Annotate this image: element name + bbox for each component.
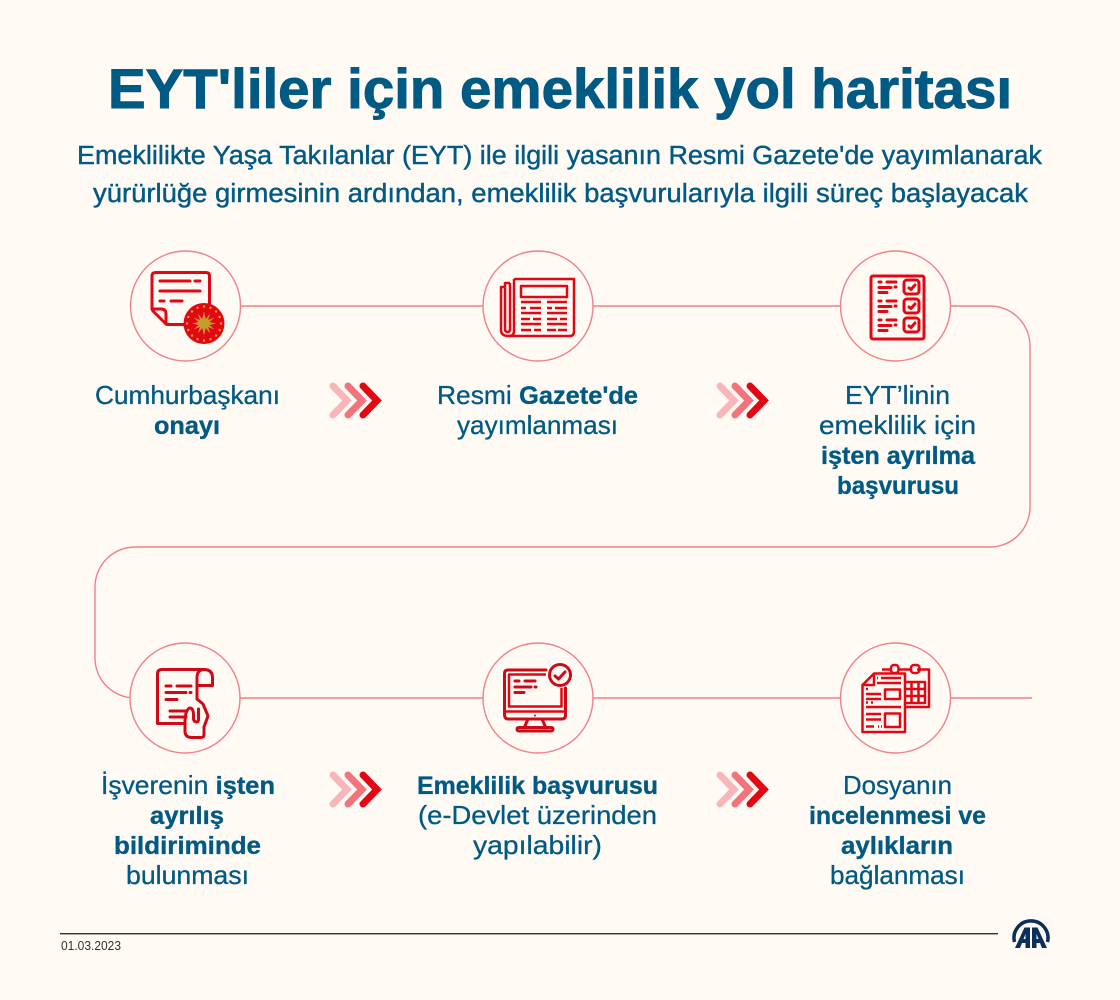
icon: hand holding scroll — [158, 670, 212, 738]
label: Dosyanın — [843, 770, 952, 800]
icon: documents and calendar — [862, 665, 929, 732]
step 6: Dosyanın incelenmesi ve aylıkların bağlanması: bağlanması — [830, 860, 965, 890]
step 5: Emeklilik başvurusu (e-Devlet): (e-Devlet üzerinden — [418, 800, 657, 830]
step 5: Emeklilik başvurusu (e-Devlet) — [417, 643, 658, 860]
step 2: Resmi Gazete'de yayımlanması — [437, 251, 638, 440]
step 3: EYT'linin emeklilik için işten ayrılma başvurusu: emeklilik için — [819, 410, 976, 440]
icon: newspaper — [501, 279, 574, 336]
footer rule — [60, 933, 998, 934]
subtitle: Emeklilikte Yaşa Takılanlar (EYT) ile ilgili yasanın Resmi Gazete'de yayımlanarak — [77, 142, 1042, 170]
step 4: İşverenin işten ayrılış bildiriminde bulunması — [101, 643, 275, 890]
step 4: İşverenin işten ayrılış bildiriminde bulunması: ayrılış — [150, 802, 224, 830]
arrow: chevrons 4 — [720, 775, 764, 804]
icon: AA logo — [1014, 921, 1048, 948]
label: Resmi Gazete'de — [437, 380, 638, 410]
step 5: Emeklilik başvurusu (e-Devlet): yapılabilir) — [473, 830, 602, 860]
icon: document with presidential seal — [152, 272, 224, 344]
step 6: Dosyanın incelenmesi ve aylıkların bağlanması: incelenmesi ve — [809, 802, 986, 830]
title: EYT'liler için emeklilik yol haritası — [108, 57, 1012, 120]
step 4: İşverenin işten ayrılış bildiriminde bulunması: bulunması — [126, 860, 249, 890]
subtitle — [77, 142, 1042, 208]
date: 01.03.2023 — [61, 939, 121, 953]
subtitle: yürürlüğe girmesinin ardından, emeklilik başvurularıyla ilgili süreç başlayacak — [93, 180, 1028, 208]
step 1: Cumhurbaşkanı onayı: onayı — [154, 412, 220, 440]
arrow: chevrons 1 — [333, 386, 377, 415]
connector path — [95, 306, 1032, 698]
arrow: chevrons 2 — [720, 386, 764, 415]
icon: checklist — [871, 276, 924, 339]
label: EYT’linin — [845, 380, 950, 410]
step 6: Dosyanın incelenmesi ve aylıkların bağlanması — [809, 643, 986, 890]
step 2: Resmi Gazete'de yayımlanması: yayımlanması — [457, 410, 618, 440]
label: İşverenin işten — [101, 770, 275, 800]
step 1: Cumhurbaşkanı onayı — [95, 251, 280, 440]
step 3: EYT'linin emeklilik için işten ayrılma başvurusu: işten ayrılma — [821, 442, 976, 470]
step 6: Dosyanın incelenmesi ve aylıkların bağlanması: aylıkların — [841, 832, 953, 860]
step 3: EYT'linin emeklilik için işten ayrılma başvurusu: başvurusu — [837, 472, 959, 500]
step 4: İşverenin işten ayrılış bildiriminde bulunması: bildiriminde — [114, 832, 261, 860]
label: Cumhurbaşkanı — [95, 380, 280, 410]
icon: computer monitor with check — [504, 664, 570, 731]
step 3: EYT'linin emeklilik için işten ayrılma başvurusu — [819, 251, 976, 500]
label: Emeklilik başvurusu — [417, 772, 658, 800]
arrow: chevrons 3 — [333, 775, 377, 804]
